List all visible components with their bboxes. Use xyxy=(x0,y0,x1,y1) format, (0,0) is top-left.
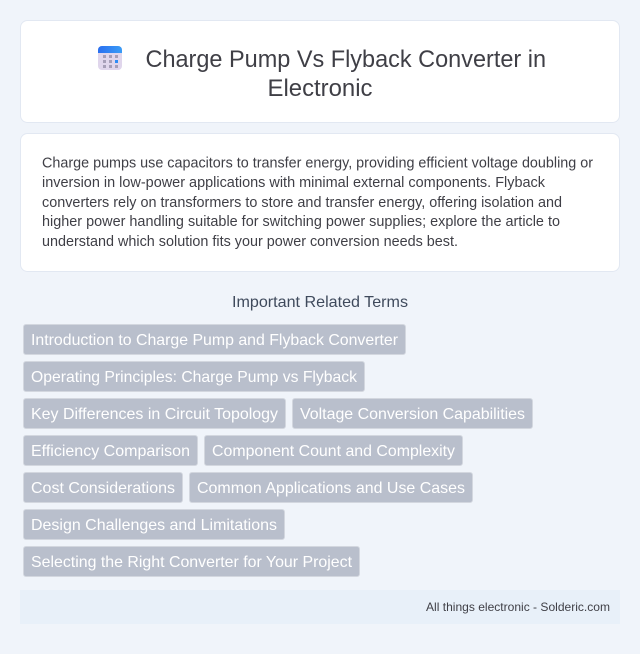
chip: selecting converter xyxy=(24,546,360,576)
chip: key differences: Key Differences in Circuit Topology xyxy=(31,406,278,423)
title: Electronic xyxy=(268,75,372,102)
chip: operating principles xyxy=(24,362,364,392)
description text: converters rely on transformers to store and transfer energy, offering isolation and xyxy=(42,195,562,211)
footer xyxy=(20,590,620,624)
description text: Charge pumps use capacitors to transfer energy, providing efficient voltage doubling or xyxy=(42,156,593,172)
chip: cost: Cost Considerations xyxy=(31,480,175,497)
chip: voltage conversion xyxy=(292,398,532,428)
chip: component count: Component Count and Complexity xyxy=(212,443,455,460)
chip: applications xyxy=(190,472,472,502)
chip: design challenges: Design Challenges and Limitations xyxy=(31,517,277,534)
description text: understand which solution fits your power conversion needs best. xyxy=(42,234,458,250)
chip: design challenges xyxy=(24,510,284,540)
chip: operating principles: Operating Principles: Charge Pump vs Flyback xyxy=(31,369,358,386)
chip: selecting converter: Selecting the Right Converter for Your Project xyxy=(31,554,353,571)
chip: voltage conversion: Voltage Conversion Capabilities xyxy=(300,406,525,423)
description text: higher power handling suitable for switching power supplies; explore the article to xyxy=(42,214,560,230)
panel: description xyxy=(20,134,620,272)
icon: calendar xyxy=(98,46,122,70)
chip: introduction xyxy=(24,324,406,354)
chip: cost xyxy=(24,472,182,502)
chip: efficiency xyxy=(24,436,198,466)
chip: introduction: Introduction to Charge Pump and Flyback Converter xyxy=(31,332,399,349)
title: Charge Pump Vs Flyback Converter in xyxy=(146,46,546,73)
chip: applications: Common Applications and Use Cases xyxy=(197,480,465,497)
chip: efficiency: Efficiency Comparison xyxy=(31,443,190,460)
heading: important related terms: Important Related Terms xyxy=(232,294,408,311)
header panel xyxy=(20,20,620,122)
chip: component count xyxy=(204,436,462,466)
title xyxy=(146,46,546,102)
description text: inversion in low-power applications with minimal external components. Flyback xyxy=(42,175,546,191)
chip: key differences xyxy=(24,398,286,428)
footer: All things electronic - Solderic.com xyxy=(426,600,610,614)
description text xyxy=(42,156,593,250)
related terms chips xyxy=(24,324,532,576)
